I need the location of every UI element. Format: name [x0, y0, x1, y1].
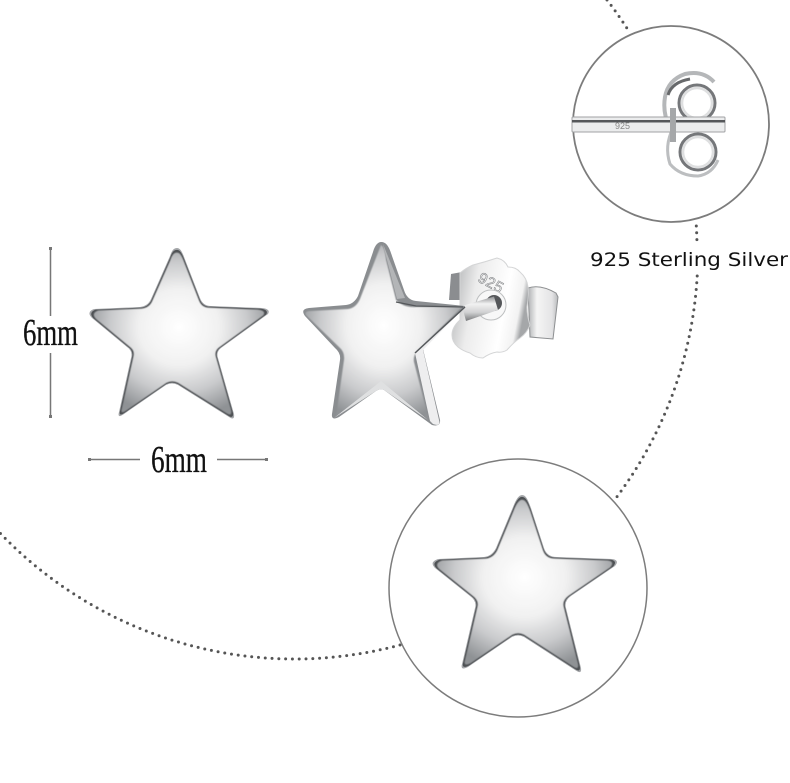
dimension: height 6mm	[23, 247, 78, 418]
earring back	[452, 258, 530, 358]
dotted connector arc	[0, 0, 697, 659]
star earring angled view with post and back	[303, 242, 558, 425]
stamp 925: 925	[475, 270, 507, 297]
dimension: width 6mm: 6mm	[151, 439, 207, 481]
dimension: width 6mm	[88, 439, 268, 481]
detail circle: post and butterfly back	[572, 26, 769, 222]
pin stamp: 925	[615, 121, 630, 131]
post and ring	[462, 290, 506, 321]
star earring front view	[89, 248, 269, 418]
detail circle: star close-up	[389, 459, 647, 717]
close-up star	[433, 495, 617, 672]
star face	[306, 245, 462, 420]
star bevel highlight	[415, 307, 465, 425]
butterfly back loops	[664, 73, 718, 176]
label: material: 925 Sterling Silver	[590, 249, 788, 271]
clutch side	[528, 287, 558, 339]
star body	[303, 242, 465, 425]
pin	[572, 117, 725, 132]
back tab	[449, 272, 462, 300]
dimension: height 6mm: 6mm	[23, 312, 78, 354]
